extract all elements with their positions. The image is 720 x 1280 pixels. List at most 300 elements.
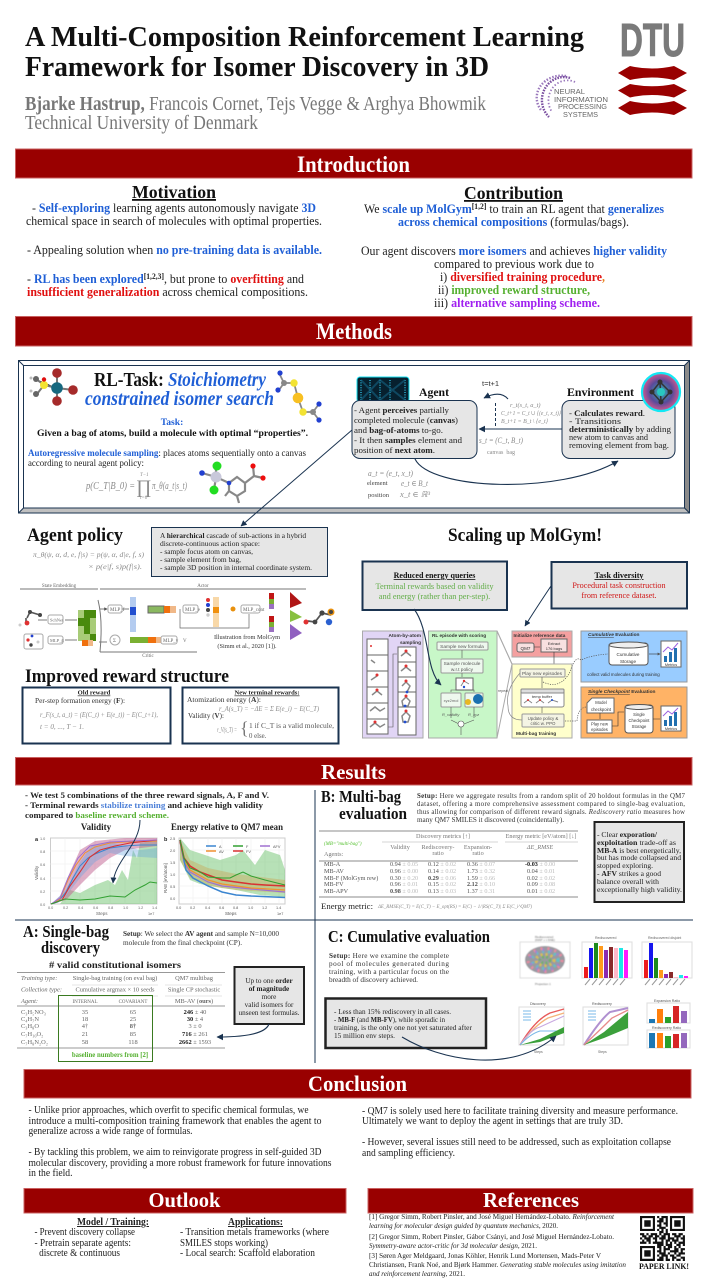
chart: validity curves: Steps xyxy=(96,911,108,916)
panel: model and training outlook: discrete & continuous xyxy=(34,1248,120,1259)
panel: model and training outlook: - Prevent discovery collapse xyxy=(34,1227,135,1238)
text block: C setup: training, with a particular focus on the xyxy=(329,968,449,976)
panel: contribution: i) diversified training procedure, xyxy=(440,270,605,284)
chart: validity curves: 0.6 xyxy=(93,906,98,910)
callout: rediscovery finding xyxy=(326,998,486,1048)
panel: new terminal rewards xyxy=(182,688,338,744)
panel: single checkpoint evaluation: Single xyxy=(633,712,645,717)
formula: policy factorization: T−1 xyxy=(140,473,149,478)
table: valid isomer counts: Cumulative argmax × 10 seeds xyxy=(75,986,155,994)
panel: cumulative evaluation: Cumulative Evaluation xyxy=(588,632,640,638)
text block: conclusion left: molecular discovery, providing a more robust framework for future innovations xyxy=(28,1158,332,1169)
table: multi-bag metrics: 0.98 ± 0.00 xyxy=(390,888,418,895)
table: multi-bag metrics: Discovery metrics [↑] xyxy=(416,833,470,840)
text block: results summary: compared to baseline reward scheme. xyxy=(25,810,169,820)
table: multi-bag metrics: 0.94 ± 0.05 xyxy=(390,861,418,868)
text block: task description xyxy=(28,417,308,469)
heading: Improved reward structure: Improved reward structure xyxy=(25,666,229,687)
panel: atom-by-atom sampling: Atom-by-atom xyxy=(388,633,421,639)
panel: contribution: across chemical compositions (formulas/bags). xyxy=(398,215,629,229)
label: t=t+1 loop xyxy=(482,379,508,399)
text block: A setup: Setup: We select the AV agent and sample N=10,000 xyxy=(123,930,280,938)
panel: RL episode with scoring: R_xyz xyxy=(468,712,479,717)
panel: cumulative evaluation: Metrics xyxy=(665,663,677,667)
chart: rediscovered disjoint bar chart xyxy=(642,936,692,985)
panel: agent description: - Agent perceives partially xyxy=(354,405,450,415)
panel: multi-bag training: Play new episodes xyxy=(522,671,563,677)
chart: rediscovery curves xyxy=(583,1002,628,1054)
table: multi-bag metrics: 0.15 ± 0.02 xyxy=(428,881,456,888)
panel: new terminal rewards: { xyxy=(240,718,249,738)
title xyxy=(25,22,584,83)
formula: policy factorization xyxy=(85,473,187,501)
callout: task diversity: from reference dataset. xyxy=(581,591,657,600)
text block: conclusion right: Ultimately we want to deploy the agent in settings that are truly 3D. xyxy=(362,1116,623,1127)
text block: task description: Given a bag of atoms, build a molecule with optimal “properties”. xyxy=(37,428,308,439)
table: valid isomer counts: 8† xyxy=(130,1023,137,1030)
text block: results summary: - We test 5 combinations of the three reward signals, A, F and V. xyxy=(25,790,269,800)
callout: hierarchical cascade: - sample element from bag, xyxy=(160,555,241,564)
panel: single checkpoint evaluation: Metrics xyxy=(665,727,677,731)
chart: expansion and rediscovery ratio bars: Expansion Ratio xyxy=(654,999,680,1003)
heading: A single-bag discovery: A: Single-bag xyxy=(23,922,109,941)
text block: references: and reinforcement learning, 2021. xyxy=(369,1269,465,1278)
panel: RL episode with scoring: Sample molecule xyxy=(444,661,481,667)
callout: order of magnitude: valid isomers for xyxy=(245,1001,294,1009)
heading: Agent policy: Agent policy xyxy=(27,525,123,546)
panel: agent description: completed molecule (canvas) xyxy=(354,415,458,425)
section band: References: References xyxy=(483,1188,579,1212)
heading: Contribution: Contribution xyxy=(464,183,563,203)
panel: RL episode with scoring: Sample new formula xyxy=(440,644,484,650)
authors and affiliation: Bjarke Hastrup, Francois Cornet, Tejs Vegge & Arghya Bhowmik xyxy=(25,93,486,115)
table: multi-bag metrics: ratio xyxy=(432,850,444,857)
chart: UMAP scatter: Projection 1 xyxy=(535,982,551,986)
text block: references: Christiansen, Frank Noé, and Bjørk Hammer. Generating stable molecules using imitation xyxy=(369,1260,626,1269)
chart: validity curves: Validity xyxy=(81,822,112,832)
arrow: agent to environment with action: e_t ∈ B_t xyxy=(401,479,429,488)
panel: initialize reference data xyxy=(512,631,572,668)
text block: references xyxy=(369,1212,626,1278)
chart: energy relative to QM7 mean: AFV xyxy=(273,845,281,849)
panel: agent description: position of next atom. xyxy=(354,445,435,455)
table: valid isomer counts: 2662 ± 1593 xyxy=(179,1039,211,1046)
heading: C cumulative evaluation: C: Cumulative evaluation xyxy=(328,927,490,946)
text block: references: learning for molecular design guided by quantum mechanics, 2020. xyxy=(369,1221,558,1230)
chart: validity curves xyxy=(34,822,157,916)
panel: new terminal rewards: Atomization energy ( A): xyxy=(187,696,261,704)
chart: UMAP scatter xyxy=(520,935,570,986)
arrow: dotted links to evaluation xyxy=(543,654,608,721)
panel: new terminal rewards: 0 else. xyxy=(249,733,267,740)
authors and affiliation: Technical University of Denmark xyxy=(25,112,258,134)
table: valid isomer counts: 18 xyxy=(82,1016,88,1023)
panel: old reward: Old reward xyxy=(78,690,111,696)
table: multi-bag metrics: MB-F (MolGym rew) xyxy=(324,875,378,882)
arrow: environment to agent with state: r_t(s_t, a_t) xyxy=(510,402,541,409)
chart: energy relative to QM7 mean: 0.2 xyxy=(190,906,195,910)
panel: contribution: We scale up MolGym xyxy=(364,202,476,216)
table: multi-bag metrics: 2.12 ± 0.10 xyxy=(467,881,495,888)
chart: validity curves: 0.6 xyxy=(40,863,45,867)
heading: A single-bag discovery: discovery xyxy=(41,938,100,957)
callout: hierarchical cascade: discrete-continuous action space: xyxy=(160,539,260,548)
table: valid isomer counts: 85 xyxy=(130,1031,136,1038)
table: multi-bag metrics: 0.14 ± 0.02 xyxy=(428,868,456,875)
chart: validity curves: 0.2 xyxy=(40,890,45,894)
chart: rediscovered bar chart: Rediscovered xyxy=(595,936,616,940)
chart: validity curves: 0.4 xyxy=(78,906,83,910)
panel: applications outlook xyxy=(180,1217,330,1259)
panel: environment description: - Calculates reward . xyxy=(569,409,645,418)
chart: discovery curves: Steps xyxy=(534,1050,543,1054)
table: valid isomer counts: Single CP stochastic xyxy=(168,986,220,994)
chart: energy relative to QM7 mean: 1.2 xyxy=(262,906,267,910)
heading: valid constitutional isomers: # valid constitutional isomers xyxy=(49,961,181,971)
chart: validity curves: 1.0 xyxy=(40,837,45,841)
highlight: baseline numbers box xyxy=(58,996,152,1062)
panel: motivation: - Self-exploring learning agents autonomously navigate 3D xyxy=(32,201,316,215)
chart: rediscovered disjoint bar chart: Rediscovered disjoint xyxy=(648,936,681,940)
table: valid isomer counts: C₃H₅NO₃ xyxy=(21,1009,46,1016)
panel: RL episode with scoring: R_validity xyxy=(442,712,460,717)
heading: B multi-bag evaluation: evaluation xyxy=(339,804,407,823)
panel: RL episode with scoring: xyz2mol xyxy=(444,698,458,703)
callout: task diversity: Task diversity xyxy=(594,571,644,580)
chart: validity curves: 1.4 xyxy=(152,906,157,910)
heading: Motivation: Motivation xyxy=(132,182,216,202)
arrow: agent to environment with action: a_t = (e_t, x_t) xyxy=(368,469,413,478)
panel: cumulative evaluation: collect valid molecules during training xyxy=(587,672,660,677)
chart: validity curves: 0.0 xyxy=(40,903,45,907)
callout: order of magnitude: Up to one order xyxy=(245,977,293,985)
table: multi-bag metrics: 0.29 ± 0.06 xyxy=(428,875,456,882)
arrow: agent to environment with action: element xyxy=(367,480,388,487)
chart: rediscovery curves: Steps xyxy=(598,1050,607,1054)
chart: energy relative to QM7 mean: RAE [eV/atom] xyxy=(163,863,168,893)
formula: energy metric: Energy metric: xyxy=(321,901,373,911)
heading: A single-bag discovery xyxy=(23,922,109,957)
text block: results summary: - Terminal rewards stabilize training and achieve high validity xyxy=(25,800,264,810)
chart: expansion and rediscovery ratio bars xyxy=(647,999,690,1048)
heading: B multi-bag evaluation: B: Multi-bag xyxy=(321,787,401,806)
panel: motivation: , but prone to xyxy=(164,272,230,286)
chart: energy relative to QM7 mean: FV xyxy=(246,850,251,854)
table: valid isomer counts: Single-bag training (on eval bag) xyxy=(73,975,157,982)
panel: model and training outlook: Model / Training: xyxy=(77,1217,149,1228)
arrow: agent to environment with action xyxy=(367,459,618,499)
chart: energy relative to QM7 mean: A xyxy=(219,845,222,849)
icon: molecule bottom xyxy=(199,462,266,503)
table: valid isomer counts: 246 ± 40 xyxy=(184,1009,206,1016)
callout: rediscovery finding: training, is the only one not yet saturated after xyxy=(334,1023,472,1032)
section band: Methods: Methods xyxy=(316,319,392,344)
panel: motivation: chemical space in search of molecules with optimal properties. xyxy=(26,214,322,228)
panel: old reward: r_F(s_t, a_t) = (E(C_t) + E(e_t)) − E(C_t+1), xyxy=(40,712,158,719)
text block: results summary xyxy=(25,790,269,820)
panel: new terminal rewards: Validity (V): xyxy=(188,712,224,720)
panel: single checkpoint evaluation: Single Checkpoint Evaluation xyxy=(588,689,656,695)
chart: energy relative to QM7 mean: 0.6 xyxy=(219,906,224,910)
table: valid isomer counts: C₃H₈O xyxy=(21,1023,39,1030)
table: multi-bag metrics xyxy=(319,831,578,897)
panel: multi-bag training xyxy=(497,631,572,738)
authors and affiliation xyxy=(25,93,486,134)
panel: RL-task bevel frame xyxy=(18,360,690,513)
chart: energy relative to QM7 mean: b xyxy=(164,837,168,843)
panel: contribution: iii) alternative sampling scheme. xyxy=(434,296,600,310)
diagram: actor-critic policy network xyxy=(18,584,334,659)
section band: Conclusion xyxy=(24,1070,691,1098)
callout: order of magnitude: unseen test formulas. xyxy=(239,1009,300,1017)
diagram: actor-critic policy network: MLP_e xyxy=(185,608,201,613)
chart: energy relative to QM7 mean: 2.0 xyxy=(170,849,175,853)
chart: energy relative to QM7 mean: Steps xyxy=(225,911,237,916)
chart: validity curves: 0.4 xyxy=(40,877,45,881)
chart: energy relative to QM7 mean: 0.0 xyxy=(170,897,175,901)
table: multi-bag metrics: 0.96 ± 0.01 xyxy=(390,881,418,888)
text block: B setup xyxy=(417,793,686,824)
chart: discovery curves: Discovery xyxy=(530,1002,546,1006)
highlight: baseline numbers box: baseline numbers from [2] xyxy=(72,1052,148,1059)
table: valid isomer counts: C₇H₈N₂O₂ xyxy=(21,1039,48,1046)
panel: single checkpoint evaluation: Model xyxy=(595,700,607,705)
table: multi-bag metrics: Expansion- xyxy=(464,844,492,851)
table: multi-bag metrics: -0.03 ± 0.00 xyxy=(525,861,555,868)
text block: conclusion left: - By tackling this problem, we aim to reinvigorate progress in self-guided 3D xyxy=(28,1147,322,1158)
diagram: actor-critic policy network: State Embedding xyxy=(42,584,77,589)
caption: illustration credit: (Simm et al., 2020 [1]). xyxy=(217,643,277,650)
label: t=t+1 loop: t=t+1 xyxy=(482,379,499,388)
callout: exploration trade-off: - AFV strikes a good xyxy=(597,869,661,878)
table: multi-bag metrics: 0.02 ± 0.02 xyxy=(527,875,555,882)
diagram: actor-critic policy network: Σ xyxy=(113,639,116,644)
formula: agent policy: × p(e|f, s)p(f|s). xyxy=(88,563,142,571)
panel: cumulative evaluation xyxy=(581,631,687,682)
panel: motivation: - Appealing solution when no pre-training data is available. xyxy=(27,243,322,257)
table: multi-bag metrics: 0.01 ± 0.02 xyxy=(527,888,555,895)
panel: multi-bag training: critic w. PPO xyxy=(531,721,556,726)
panel: single checkpoint evaluation: episodes xyxy=(591,727,608,732)
callout: reduced energy queries: Terminal rewards based on validity xyxy=(375,582,494,591)
panel: environment description: removing element from bag. xyxy=(569,441,669,450)
formula: agent policy xyxy=(33,551,145,571)
chart: validity curves: 0.2 xyxy=(63,906,68,910)
chart: energy relative to QM7 mean: 0.5 xyxy=(170,885,175,889)
diagram: actor-critic policy network: MLP_cont xyxy=(243,608,265,613)
table: valid isomer counts: 716 ± 261 xyxy=(182,1031,208,1038)
table: valid isomer counts: Agent: xyxy=(20,998,38,1005)
text block: task description: Autoregressive molecule sampling: places atoms sequentially onto a canvas xyxy=(28,448,306,459)
table: multi-bag metrics: Validity xyxy=(390,844,411,851)
table: valid isomer counts: 30 ± 4 xyxy=(187,1016,204,1023)
formula: policy factorization: p(C_T|B_0) = xyxy=(85,481,135,492)
table: valid isomer counts: MB-AV (ours) xyxy=(175,998,213,1005)
panel: agent description xyxy=(352,400,477,458)
panel: new terminal rewards: r_V(s_T) = xyxy=(217,727,237,734)
panel: RL episode with scoring: w.r.t policy xyxy=(451,667,474,673)
panel: applications outlook: SMILES stops working) xyxy=(180,1238,268,1249)
callout: exploration trade-off: - Clear exporation/ xyxy=(597,830,658,839)
panel: RL episode with scoring: RL episode with scoring xyxy=(432,633,486,638)
panel: cumulative evaluation: Cumulative xyxy=(617,652,640,657)
table: multi-bag metrics: ratio xyxy=(472,850,484,857)
chart: validity curves: 1.0 xyxy=(123,906,128,910)
text block: conclusion right xyxy=(362,1106,678,1159)
arrow: task diversity to reference data xyxy=(525,586,551,626)
table: multi-bag metrics: 0.96 ± 0.00 xyxy=(390,868,418,875)
callout: order of magnitude: of magnitude xyxy=(249,985,289,993)
table: multi-bag metrics: (MB="multi-bag") xyxy=(324,842,362,847)
panel: single checkpoint evaluation xyxy=(581,687,687,738)
panel: initialize reference data: 176 bags xyxy=(546,646,562,651)
title: Framework for Isomer Discovery in 3D xyxy=(25,52,489,83)
text block: conclusion left: - Unlike prior approaches, which overfit to specific chemical formulas, we xyxy=(28,1105,309,1116)
icon: molecule left xyxy=(30,368,78,406)
table: multi-bag metrics: MB-A xyxy=(324,861,341,868)
table: multi-bag metrics: Rediscovery- xyxy=(422,844,454,851)
panel: cumulative evaluation: Storage xyxy=(620,659,636,664)
text block: conclusion left: in the field. xyxy=(28,1168,72,1179)
chart: validity curves: a xyxy=(35,837,39,843)
callout: exploration trade-off: exploitation trade-off as xyxy=(597,838,676,847)
text block: conclusion left: generalize across a wide range of formulas. xyxy=(28,1126,192,1137)
chart: energy relative to QM7 mean: AV xyxy=(219,850,224,854)
callout: exploration trade-off: exceptionally high validity. xyxy=(597,885,682,894)
callout: exploration trade-off: balance overall with xyxy=(597,877,659,886)
section band: Outlook: Outlook xyxy=(148,1188,221,1212)
section band: Results: Results xyxy=(321,760,386,784)
text block: conclusion right: and sampling efficiency. xyxy=(362,1148,455,1159)
heading: B multi-bag evaluation xyxy=(321,787,407,823)
arrow: agent to environment with action: position xyxy=(368,492,390,499)
panel: RL episode with scoring xyxy=(428,631,497,738)
panel: model and training outlook xyxy=(34,1217,149,1259)
panel: environment description: new atom to canvas and xyxy=(569,433,649,442)
callout: task diversity xyxy=(552,562,687,608)
panel: applications outlook: Applications: xyxy=(228,1217,283,1228)
callout: exploration trade-off: but has mode collapsed and xyxy=(597,853,681,862)
heading: RL-Task xyxy=(85,369,274,410)
diagram: actor-critic policy network: MLP_f xyxy=(110,608,125,613)
callout: task diversity: Procedural task construction xyxy=(572,581,666,590)
text block: references: [3] Søren Ager Meldgaard, Jonas Köhler, Henrik Lund Mortensen, Mads-Peter V xyxy=(369,1251,601,1260)
table: multi-bag metrics: 0.13 ± 0.03 xyxy=(428,888,456,895)
arrow: callout to our results xyxy=(217,1024,269,1037)
panel: contribution: to train an RL agent that xyxy=(486,202,608,216)
section band: Methods xyxy=(16,316,692,346)
section band: References xyxy=(368,1188,693,1213)
table: valid isomer counts: 118 xyxy=(128,1039,138,1046)
arrow: environment to agent with state: canvas bag xyxy=(487,450,515,456)
callout: hierarchical cascade: - sample focus atom on canvas, xyxy=(160,547,253,556)
panel: agent description: and bag-of-atoms to-go. xyxy=(354,425,443,435)
callout: exploration trade-off: stopped exploring. xyxy=(597,861,653,870)
panel: environment description xyxy=(562,400,675,458)
diagram: actor-critic policy network: MLP_β xyxy=(50,638,65,643)
arrow: environment to agent with state: B_t+1 = B_t \ {e_t} xyxy=(501,418,548,425)
callout: rediscovery finding: - Less than 15% rediscovery in all cases. xyxy=(334,1007,451,1016)
chart: validity curves: 1e7 xyxy=(148,912,154,916)
table: multi-bag metrics: MB-APV xyxy=(324,888,349,895)
chart: validity curves: Validity xyxy=(34,865,39,880)
logo: NeurIPS xyxy=(537,76,608,119)
table: multi-bag metrics: 0.12 ± 0.02 xyxy=(428,861,456,868)
table: multi-bag metrics: 0.36 ± 0.07 xyxy=(467,861,495,868)
table: valid isomer counts: INTERNAL xyxy=(72,1000,98,1005)
chart: validity curves: 0.8 xyxy=(108,906,113,910)
text block: conclusion right: - However, several issues still need to be addressed, such as exploitation collapse xyxy=(362,1137,671,1148)
panel: initialize reference data: Initialize reference data xyxy=(514,633,566,638)
text block: A setup: molecule from the final checkpoint (CP). xyxy=(123,939,242,947)
arrow: baseline scheme to green curve xyxy=(113,820,140,883)
chart: expansion and rediscovery ratio bars: Rediscovery Ratio xyxy=(652,1026,681,1030)
panel: old reward xyxy=(22,688,170,744)
callout: rediscovery finding: 15 million env steps. xyxy=(334,1031,395,1040)
chart: energy relative to QM7 mean: 0.4 xyxy=(205,906,210,910)
text block: C setup xyxy=(329,952,449,984)
panel: atom-by-atom sampling: sampling xyxy=(400,640,421,646)
panel: motivation: - RL has been explored xyxy=(27,272,149,286)
panel: contribution xyxy=(361,183,668,310)
connector: zoom trapezoid lines xyxy=(497,631,512,738)
callout: order of magnitude xyxy=(234,967,304,1024)
table: multi-bag metrics: Energy metric [eV/atom] [↓] xyxy=(506,833,576,840)
section band: Introduction xyxy=(16,149,692,178)
heading: RL-Task: RL-Task: Stoichiometry xyxy=(94,369,266,391)
chart: rediscovered bar chart xyxy=(582,936,632,985)
table: multi-bag metrics: MB-AV xyxy=(324,868,344,875)
chart: energy relative to QM7 mean: 0.8 xyxy=(233,906,238,910)
panel: motivation: [1,2,3] xyxy=(144,272,164,281)
table: valid isomer counts: 25 xyxy=(130,1016,136,1023)
text block: references: [2] Gregor Simm, Robert Pinsler, Gábor Csányi, and José Miguel Hernández-Lobato. xyxy=(369,1232,614,1241)
text block: task description: according to neural agent policy: xyxy=(28,458,144,469)
text block: B setup: many QM7 SMILES it discovered (coincidentally). xyxy=(417,817,564,824)
text block: C setup: Setup: Here we examine the complete xyxy=(329,952,449,960)
section band: Conclusion: Conclusion xyxy=(308,1071,407,1096)
text block: task description: Task: xyxy=(161,417,183,428)
text block: B setup: dataset, offering a more comprehensive assessment compared to single-bag evaluation, xyxy=(417,801,685,808)
arrow: environment to agent with state xyxy=(479,402,562,456)
panel: initialize reference data: Extract xyxy=(548,641,561,646)
arrow: environment to agent with state: s_t = (C_t, B_t) xyxy=(479,435,523,445)
section band: Results xyxy=(16,758,692,785)
caption: illustration credit xyxy=(214,634,280,650)
chart: discovery curves xyxy=(519,1002,564,1054)
text block: B setup: Setup: Here we aggregate results from a random split of 20 holdout formulas in the QM7 xyxy=(417,793,686,800)
panel: new terminal rewards: New terminal rewards: xyxy=(234,690,300,696)
formula: policy factorization: π_θ(a_t|s_t) xyxy=(152,481,187,492)
formula: policy factorization: ∏ xyxy=(136,477,152,498)
table: multi-bag metrics: Agents: xyxy=(324,851,344,858)
table: multi-bag metrics: 0.09 ± 0.08 xyxy=(527,881,555,888)
callout: reduced energy queries xyxy=(362,562,507,610)
chart: validity curves: 1.2 xyxy=(138,906,143,910)
heading: Agent: Agent xyxy=(419,385,449,399)
panel: agent description: - It then samples element and xyxy=(354,435,463,445)
diagram: actor-critic policy network: MLP_v xyxy=(163,639,179,644)
logo: NeurIPS: SYSTEMS xyxy=(563,112,598,119)
table: multi-bag metrics: 0.04 ± 0.01 xyxy=(527,868,555,875)
callout: hierarchical cascade xyxy=(152,528,328,576)
formula: energy metric xyxy=(321,901,532,911)
panel: multi-bag training: Update policy & xyxy=(528,716,558,721)
table: multi-bag metrics: ΔE_RMSE xyxy=(526,844,553,851)
table: valid isomer counts: 4† xyxy=(82,1023,88,1030)
table: multi-bag metrics: 1.73 ± 0.32 xyxy=(467,868,495,875)
panel: new terminal rewards: 1 if C_T is a valid molecule, xyxy=(249,723,334,730)
